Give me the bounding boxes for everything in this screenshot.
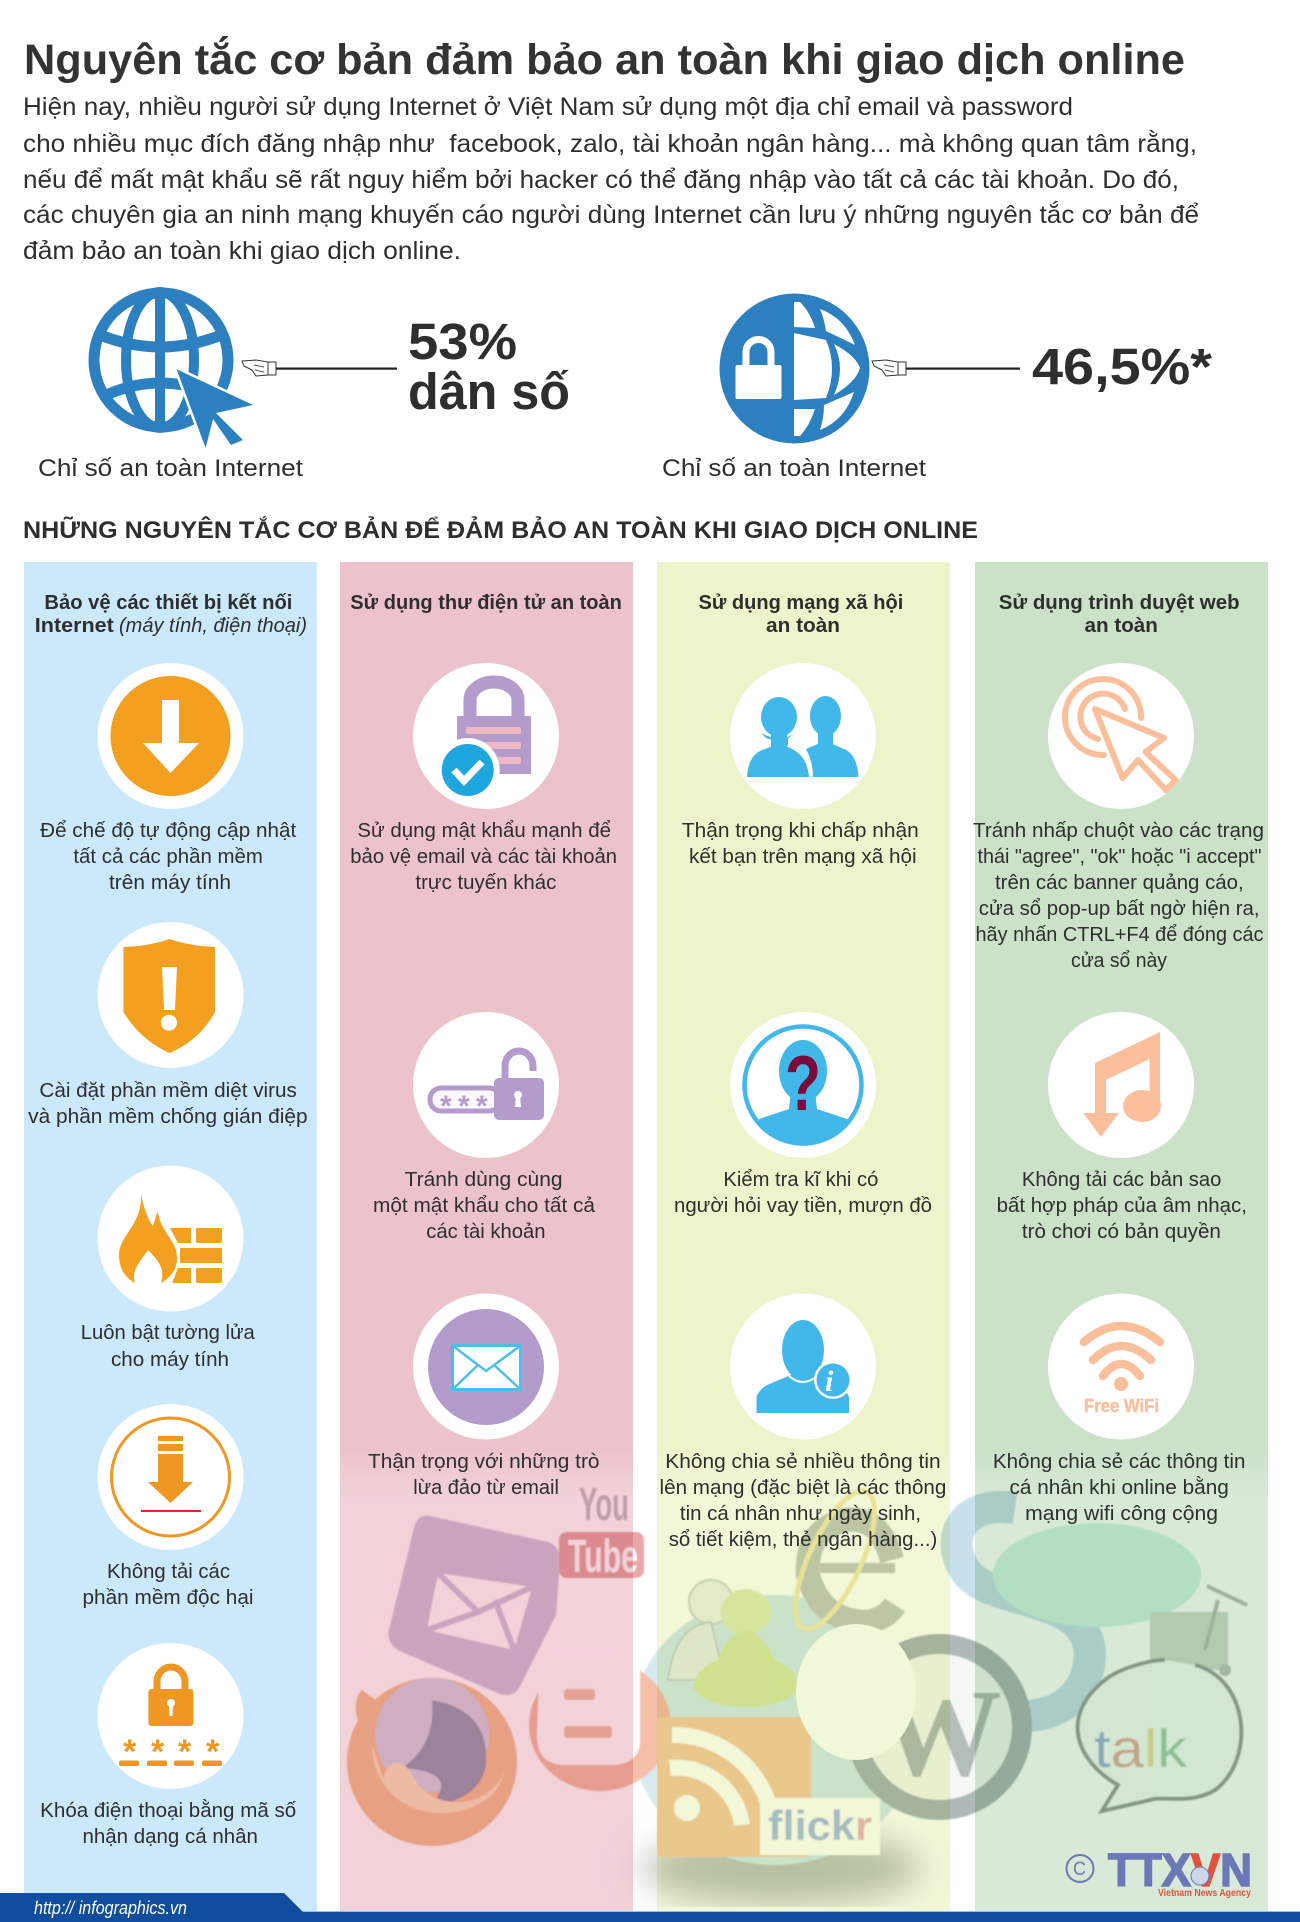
icon: lock with PIN	[98, 1643, 244, 1789]
heading: an toàn	[1084, 614, 1158, 637]
icon: two people	[730, 663, 876, 809]
intro paragraph: cho nhiều mục đích đăng nhập như facebook, zalo, tài khoản ngân hàng... mà không quan tâm rằng,	[23, 129, 1197, 158]
statistic: internet users	[38, 292, 570, 482]
text	[82, 1560, 254, 1609]
item: email scams	[368, 1294, 600, 1499]
icon: globe with cursor	[94, 292, 253, 448]
collage: Messenger figures	[668, 1580, 798, 1707]
collage: Internet Explorer logo	[780, 1481, 895, 1639]
intro paragraph: đảm bảo an toàn khi giao dịch online.	[23, 237, 461, 265]
heading: Bảo vệ các thiết bị kết nối	[44, 591, 292, 614]
text	[350, 819, 617, 894]
text	[997, 1168, 1247, 1243]
stat value: 53% dân số: 53%	[408, 313, 517, 370]
stat value: 53% dân số: dân số	[408, 363, 570, 420]
icon: lock with PIN: *	[151, 1733, 165, 1771]
collage: YouTube logo: Tube	[568, 1530, 638, 1582]
icon: padlock with check	[413, 663, 559, 809]
item: phone lock	[40, 1643, 296, 1848]
text: phần mềm độc hại	[82, 1586, 254, 1609]
text: cửa sổ này	[1071, 949, 1168, 972]
collage: pale highlight	[796, 1624, 916, 1760]
item: antivirus	[28, 922, 308, 1128]
text: trên máy tính	[109, 871, 231, 894]
statistic: safety index	[662, 294, 1212, 482]
collage: Google Talk bubble	[1078, 1660, 1241, 1811]
stat value: 53% dân số	[408, 313, 570, 420]
heading: Internet	[35, 614, 114, 637]
collage: WordPress logo: W	[877, 1665, 1002, 1803]
panel: protect devices	[28, 591, 308, 1848]
stat value: 46,5%: 46,5%*	[1032, 338, 1212, 395]
collage: Skype logo	[957, 1507, 1090, 1716]
text	[40, 1799, 296, 1848]
text: Không chia sẻ nhiều thông tin	[665, 1450, 941, 1473]
icon: person with question mark: ?	[785, 1039, 821, 1127]
icon: free wifi: Free WiFi	[1084, 1396, 1159, 1416]
text: Cài đặt phần mềm diệt virus	[39, 1079, 297, 1102]
intro paragraph	[23, 93, 1199, 265]
icon: music note download	[1048, 1012, 1194, 1158]
icon: password field and open lock	[413, 1012, 559, 1158]
text: trực tuyến khác	[415, 871, 556, 894]
icon: envelope	[413, 1294, 559, 1440]
caption: Chỉ số an toàn Internet	[38, 455, 303, 482]
icon: download ring	[98, 1404, 244, 1550]
item: public wifi	[993, 1294, 1245, 1525]
text: các tài khoản	[426, 1220, 546, 1243]
background collage of web logos	[340, 1447, 1268, 1912]
logo: TTXVN: C	[1073, 1859, 1086, 1880]
text: nhận dạng cá nhân	[82, 1825, 258, 1848]
column backgrounds	[24, 562, 1268, 1912]
item: strong password	[350, 663, 617, 894]
text: bảo vệ email và các tài khoản	[350, 845, 617, 868]
icon: password field and open lock: *	[476, 1090, 488, 1123]
heading: Sử dụng mạng xã hội	[698, 591, 903, 614]
item: avoid banner clicks	[973, 663, 1264, 972]
text	[40, 819, 296, 894]
icon: password field and open lock: *	[458, 1090, 470, 1123]
icon: shield	[98, 922, 244, 1068]
panel: safe web browser	[973, 591, 1264, 1525]
collage: YouTube logo: You	[579, 1478, 629, 1530]
footer bar	[0, 1893, 1300, 1922]
panel: safe email	[350, 591, 622, 1499]
icon: lock with PIN: *	[178, 1733, 192, 1771]
heading	[698, 591, 903, 637]
intro paragraph: Hiện nay, nhiều người sử dụng Internet ở Việt Nam sử dụng một địa chỉ email và password	[23, 93, 1073, 121]
collage: shopping cart	[1150, 1586, 1247, 1691]
collage: sphere and shadow	[630, 1595, 920, 1904]
item: automatic updates	[40, 663, 296, 894]
text: Thận trọng khi chấp nhận	[682, 819, 919, 842]
icon: password field and open lock: *	[440, 1090, 452, 1123]
icon: lock with PIN: *	[206, 1733, 220, 1771]
text: lừa đảo từ email	[413, 1476, 559, 1499]
text: kết bạn trên mạng xã hội	[689, 845, 917, 868]
item: firewall	[81, 1166, 255, 1371]
text: Để chế độ tự động cập nhật	[40, 819, 296, 842]
text	[373, 1168, 596, 1243]
text: Tránh nhấp chuột vào các trạng	[973, 819, 1264, 842]
text	[973, 819, 1264, 972]
text: Thận trọng với những trò	[368, 1450, 600, 1473]
icon: pointing hand and line	[872, 360, 1020, 376]
icon: person with info badge: i	[825, 1365, 834, 1398]
icon: clicking cursor	[1048, 663, 1194, 809]
collage: YouTube logo	[559, 1478, 644, 1582]
text: Kiểm tra kĩ khi có	[723, 1168, 878, 1191]
logo: TTXVN: TTXVN	[1108, 1844, 1252, 1896]
text: người hỏi vay tiền, mượn đồ	[674, 1194, 932, 1217]
icon: person with question mark	[730, 1012, 876, 1158]
text: lên mạng (đặc biệt là các thông	[660, 1476, 946, 1499]
icon: flame and bricks	[98, 1166, 244, 1312]
text: mạng wifi công cộng	[1025, 1502, 1218, 1525]
text: trên các banner quảng cáo,	[995, 871, 1244, 894]
intro paragraph: các chuyên gia an ninh mạng khuyến cáo người dùng Internet cần lưu ý những nguyên tắc cơ bản để	[23, 200, 1199, 229]
text: Tránh dùng cùng	[405, 1168, 563, 1191]
collage: Flickr logo: flickr	[768, 1802, 872, 1849]
icon: free wifi	[1048, 1294, 1194, 1440]
panel: safe social media	[660, 591, 946, 1551]
item: friend requests	[682, 663, 919, 868]
item: illegal copies	[997, 1012, 1247, 1243]
title: Nguyên tắc cơ bản đảm bảo an toàn khi giao dịch online	[24, 35, 1185, 84]
text: trò chơi có bản quyền	[1022, 1220, 1221, 1243]
section heading: NHỮNG NGUYÊN TẮC CƠ BẢN ĐỂ ĐẢM BẢO AN TOÀN KHI GIAO DỊCH ONLINE	[23, 515, 978, 544]
text	[81, 1321, 255, 1371]
heading: Sử dụng trình duyệt web	[999, 591, 1240, 614]
icon: globe with lock	[720, 294, 870, 444]
collage: Blogger logo	[529, 1630, 671, 1791]
text: cho máy tính	[111, 1348, 229, 1371]
footer url: http:// infographics.vn	[34, 1898, 187, 1918]
text: Không tải các	[107, 1560, 230, 1583]
item: money requests	[674, 1012, 932, 1217]
text: Luôn bật tường lửa	[81, 1321, 255, 1344]
caption: Chỉ số an toàn Internet	[662, 455, 926, 482]
text: cá nhân khi online bằng	[1010, 1476, 1229, 1499]
text	[993, 1450, 1245, 1525]
text: Không chia sẻ các thông tin	[993, 1450, 1245, 1473]
logo: TTXVN: Vietnam News Agency	[1158, 1887, 1251, 1899]
heading	[35, 591, 307, 637]
text: sổ tiết kiệm, thẻ ngân hàng...)	[669, 1528, 937, 1551]
collage: WordPress logo	[856, 1644, 1022, 1810]
text: hãy nhấn CTRL+F4 để đóng các	[976, 923, 1264, 946]
text	[28, 1079, 308, 1128]
heading: an toàn	[766, 614, 840, 637]
text	[368, 1450, 600, 1499]
intro paragraph: nếu để mất mật khẩu sẽ rất nguy hiểm bởi hacker có thể đăng nhập vào tất cả các tài khoản. Do đó,	[23, 166, 1179, 194]
text: và phần mềm chống gián điệp	[28, 1105, 308, 1128]
text: tất cả các phần mềm	[73, 845, 263, 868]
text: một mật khẩu cho tất cả	[373, 1194, 596, 1217]
text: cửa sổ pop-up bất ngờ hiện ra,	[979, 897, 1260, 920]
collage: RSS icon	[657, 1717, 811, 1857]
collage: Twitter bubble	[993, 1523, 1201, 1627]
text: tin cá nhân như ngày sinh,	[680, 1502, 921, 1525]
heading	[999, 591, 1240, 637]
icon: person with info badge	[730, 1294, 876, 1440]
item: personal information	[660, 1294, 946, 1551]
text	[660, 1450, 946, 1551]
icon: pointing hand and line	[242, 360, 397, 376]
text	[682, 819, 919, 868]
text	[674, 1168, 932, 1217]
item: malware downloads	[82, 1404, 254, 1609]
text: Sử dụng mật khẩu mạnh để	[357, 819, 611, 842]
text: bất hợp pháp của âm nhạc,	[997, 1194, 1247, 1217]
icon: lock with PIN: *	[123, 1733, 137, 1771]
icon: download arrow	[98, 663, 244, 809]
collage: Firefox logo	[347, 1678, 517, 1846]
collage: Google Talk bubble: talk	[1094, 1719, 1188, 1779]
item: unique passwords	[373, 1012, 596, 1243]
text: Không tải các bản sao	[1022, 1168, 1221, 1191]
heading: Sử dụng thư điện tử an toàn	[350, 591, 622, 614]
text: thái "agree", "ok" hoặc "i accept"	[978, 845, 1262, 868]
collage: mail icon	[389, 1516, 560, 1695]
heading: (máy tính, điện thoại)	[119, 614, 307, 637]
text: Khóa điện thoại bằng mã số	[40, 1799, 296, 1822]
